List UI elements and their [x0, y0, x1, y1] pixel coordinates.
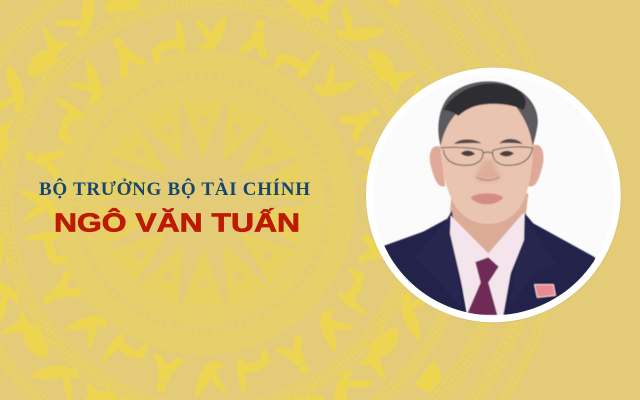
- hair: [438, 81, 538, 146]
- portrait backdrop: [373, 75, 614, 315]
- lapels: [415, 217, 557, 307]
- tie: [467, 257, 499, 315]
- nose underside: [477, 177, 499, 180]
- portrait: [366, 68, 621, 327]
- eyebrows: [454, 139, 523, 144]
- dark hair highlights: [443, 83, 526, 116]
- eyes: [461, 151, 514, 156]
- title: name: NGÔ VĂN TUẤN: [54, 208, 300, 238]
- mouth: [471, 193, 503, 204]
- title: position: BỘ TRƯỞNG BỘ TÀI CHÍNH: [39, 178, 310, 200]
- face: [440, 102, 534, 224]
- lapel pin: [535, 285, 555, 297]
- glasses: [441, 147, 533, 165]
- shirt: [450, 211, 525, 315]
- ears: [430, 145, 544, 187]
- suit: [384, 210, 596, 315]
- neck: [449, 193, 528, 255]
- portrait white frame: [366, 68, 621, 322]
- portrait figure: [383, 81, 600, 327]
- nose shading: [475, 160, 500, 182]
